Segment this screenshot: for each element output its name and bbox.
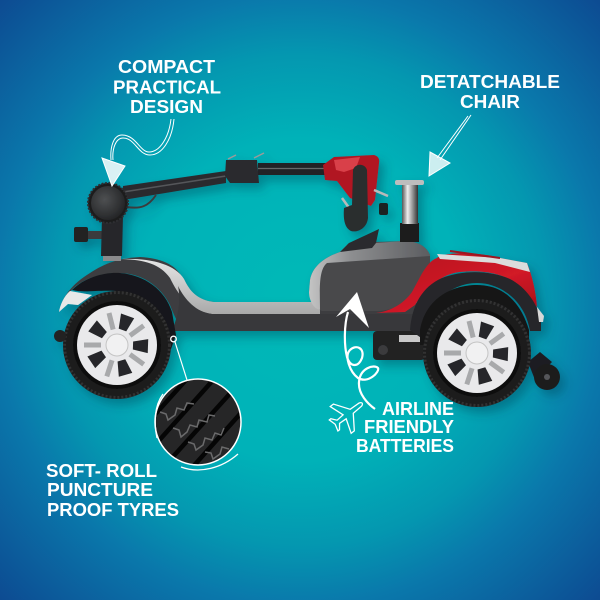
arrow [102,119,174,186]
heading: DETATCHABLE [420,71,560,92]
steering column [74,216,123,261]
heading: COMPACT [118,56,216,77]
tyre detail magnifier [150,336,248,470]
battery box [309,229,430,311]
tread pattern [156,381,240,464]
heading: BATTERIES [356,435,454,456]
chair post [395,180,424,242]
icon: airplane [323,390,373,439]
heading: CHAIR [460,91,520,112]
small front bumper roller [54,330,66,342]
steering head with armrest [323,155,388,231]
leader line [171,336,187,380]
callout: airline friendly batteries [323,292,455,456]
callout: soft-roll puncture proof tyres: PROOF TYRES [47,499,179,520]
outer arcs [155,394,238,470]
tiller ball joint [88,183,128,223]
callout: compact practical design [102,56,221,186]
heading [113,56,221,117]
heading: FRIENDLY [364,416,455,437]
heading [420,71,560,112]
tiller arm [123,153,326,208]
callout: soft-roll puncture proof tyres: SOFT- ROLL [46,460,157,481]
callout: soft-roll puncture proof tyres: PUNCTURE [47,479,153,500]
callout: soft-roll puncture proof tyres [46,460,179,520]
looping arrow [336,292,378,409]
heading: AIRLINE [382,398,454,419]
scooter illustration [54,153,560,407]
front fender and deck [59,257,420,352]
under-deck motor [373,331,425,360]
rear wheel [423,299,531,407]
heading: DESIGN [130,96,203,117]
callout: detatchable chair [420,71,560,176]
front wheel [63,291,171,399]
arrow [429,115,471,176]
heading: PRACTICAL [113,76,221,98]
heading [356,398,455,456]
rear fender [410,272,544,345]
anti-tip wheel [528,352,560,390]
red rear shroud [376,251,537,313]
